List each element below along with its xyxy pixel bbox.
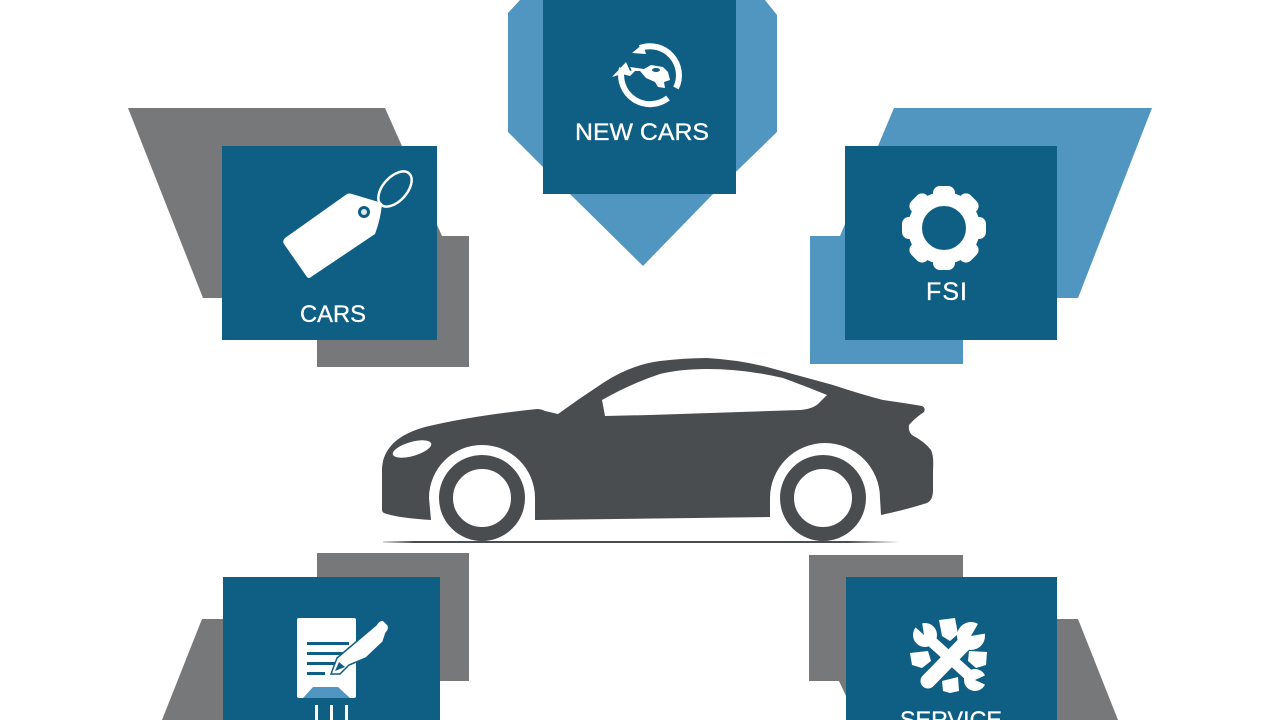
cars backing rectangle [317,236,469,367]
FSI label: FSI [926,278,967,306]
front wheel [446,462,518,534]
headlight [391,437,433,461]
service small corner [839,681,846,696]
panel: service [809,555,1118,720]
panel: FSI [810,108,1152,364]
new cars card [543,0,736,194]
panel: cars [128,108,469,367]
icon: document and pen [297,618,389,720]
paperwork card [223,577,440,720]
ground line [383,541,900,543]
service backing parallelogram [1057,619,1118,720]
car body [382,358,933,520]
rear wheel [787,462,859,534]
car silhouette [382,358,933,543]
icon: crossed wrenches [910,615,994,693]
panel: paperwork [162,553,469,720]
new cars backing shape [508,0,777,266]
cars backing parallelogram [128,108,442,298]
icon: circular arrows with car [612,44,679,104]
panel: new cars [508,0,777,266]
service card [846,577,1057,720]
icon: gear [902,186,986,270]
FSI backing parallelogram [840,108,1152,298]
paperwork backing rectangle [317,553,469,681]
new cars label: NEW CARS [575,119,709,146]
icon: price tag [283,165,418,278]
FSI backing rectangle [810,236,963,364]
FSI card [845,146,1057,340]
cars label: CARS [300,301,366,328]
cars card [222,146,437,340]
paperwork backing parallelogram [162,619,223,720]
service backing rectangle [809,555,963,681]
